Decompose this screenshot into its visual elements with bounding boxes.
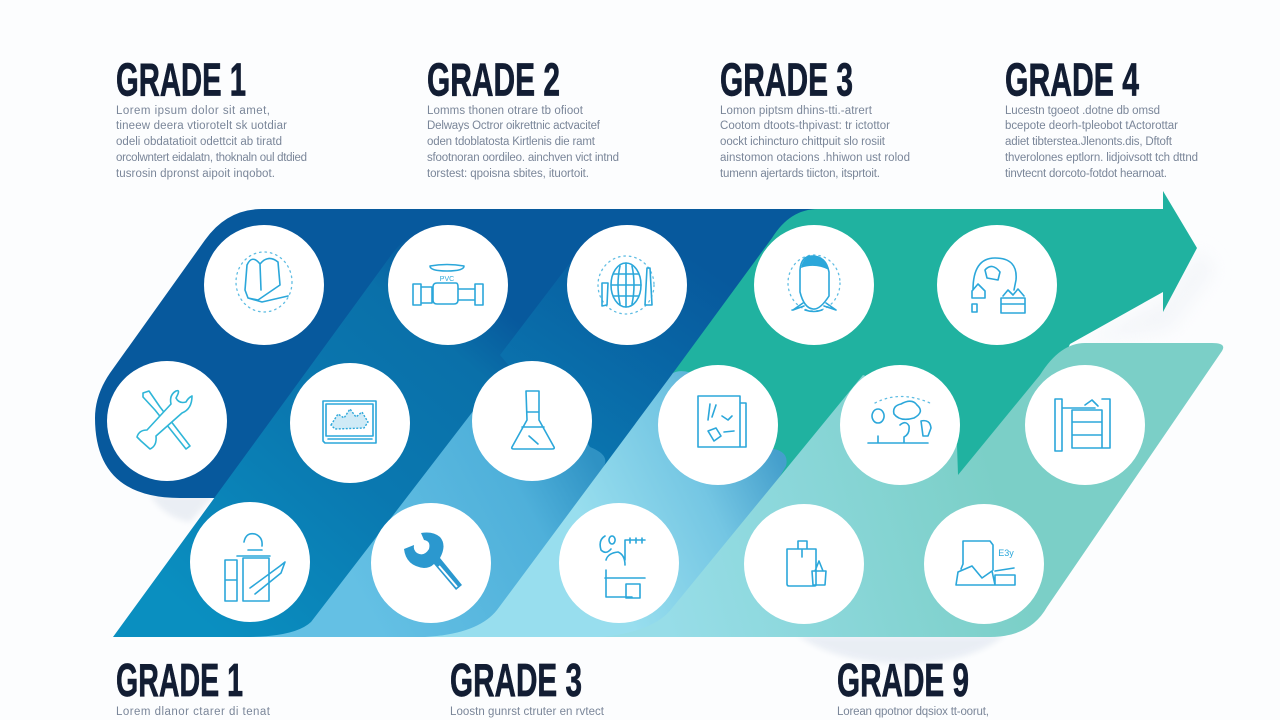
- heading block: grade 3 top: ainstomon otacions .hhiwon ust rolod: [720, 152, 910, 164]
- heading block: grade 3 bottom: Loostn gunrst ctruter en rvtect: [450, 706, 605, 718]
- heading block: grade 3 bottom: GRADE 3: [450, 654, 582, 706]
- icon circle row 2: bookshelf: [1025, 365, 1145, 485]
- icon circle row 3: solid wrench: [371, 503, 491, 623]
- icon circle row 1: valve pipe: PVC: [440, 276, 454, 283]
- icon circle row 1: face portrait: [754, 225, 874, 345]
- icon circle row 2: framed picture screen: [290, 363, 410, 483]
- ribbon: mid blue band: [113, 228, 560, 637]
- icon circle row 1: gear arch and box: [937, 225, 1057, 345]
- heading block: grade 4 top: bcepote deorh-tpleobot tActorottar: [1005, 120, 1178, 132]
- heading block: grade 2 top: torstest: qpoisna sbites, ituortoit.: [427, 168, 589, 180]
- heading block: grade 1 top: Lorem ipsum dolor sit amet,: [116, 105, 270, 117]
- icon circle row 3: gears and machine: [559, 503, 679, 623]
- heading block: grade 3 bottom: [450, 654, 605, 718]
- icon circle row 3: bag with bucket: [744, 504, 864, 624]
- heading block: grade 1 bottom: GRADE 1: [116, 654, 243, 706]
- ribbon: mid blue upper band: [500, 240, 740, 480]
- icon circle row 1: person/brain: [204, 225, 324, 345]
- heading block: grade 4 top: thverolones eptlorn. lidjoivsott tch dttnd: [1005, 152, 1198, 164]
- icon circle row 1: valve pipe: [388, 225, 508, 345]
- heading block: grade 1 top: odeli obdatatioit odettcit ab tiratd: [116, 136, 282, 148]
- ribbon: dark blue band: [95, 209, 845, 500]
- heading block: grade 1 bottom: Lorem dlanor ctarer di tenat: [116, 706, 271, 718]
- icon circle row 3: monitor and books: E3y: [998, 548, 1014, 558]
- heading block: grade 1 bottom: [116, 654, 271, 718]
- heading block: grade 1 top: tusrosin dpronst aipoit inqobot.: [116, 168, 275, 180]
- heading block: grade 4 top: adiet tibterstea.Jlenonts.dis, Dftoft: [1005, 136, 1173, 148]
- icon circle row 3: drafting tools: [190, 502, 310, 622]
- heading block: grade 2 top: Delways Octror oikrettnic actvacitef: [427, 120, 601, 132]
- heading block: grade 9 bottom: Lorean qpotnor dqsiox tt-oorut,: [837, 706, 989, 718]
- icon circle row 1: globe with tools: [567, 225, 687, 345]
- heading block: grade 4 top: Lucestn tgoeot .dotne db omsd: [1005, 105, 1160, 117]
- icon circle row 2: document sheet: [658, 365, 778, 485]
- heading block: grade 4 top: [1005, 54, 1198, 180]
- ribbon: pale blue band: [425, 371, 787, 637]
- heading block: grade 1 top: tineew deera vtiorotelt sk uotdiar: [116, 120, 287, 132]
- icon circle row 3: monitor and books: [924, 504, 1044, 624]
- icon circle row 2: crossed wrench and screwdriver: [107, 361, 227, 481]
- heading block: grade 2 top: GRADE 2: [427, 54, 560, 106]
- heading block: grade 1 top: [116, 54, 307, 180]
- heading block: grade 3 top: GRADE 3: [720, 54, 853, 106]
- heading block: grade 9 bottom: GRADE 9: [837, 654, 969, 706]
- heading block: grade 1 top: orcolwntert eidalatn, thoknaln oul dtdied: [116, 152, 307, 164]
- icon circle row 2: flask: [472, 361, 592, 481]
- chevron diagram: [95, 191, 1223, 637]
- heading block: grade 2 top: sfootnoran oordileo. ainchven vict intnd: [427, 152, 619, 164]
- heading block: grade 3 top: tumenn ajertards tiicton, itsprtoit.: [720, 168, 880, 180]
- heading block: grade 9 bottom: [837, 654, 989, 718]
- heading block: grade 2 top: [427, 54, 619, 180]
- heading block: grade 3 top: Cootom dtoots-thpivast: tr ictottor: [720, 120, 890, 132]
- heading block: grade 4 top: tinvtecnt dorcoto-fotdot hearnoat.: [1005, 168, 1167, 180]
- heading block: grade 3 top: oockt ichincturo chittpuit slo rosiit: [720, 136, 886, 148]
- ribbon: teal arrow: [640, 191, 1197, 530]
- icon circle row 2: trees: [840, 365, 960, 485]
- shadows under the ribbons: [150, 250, 1215, 664]
- ribbon: pale teal band: [600, 343, 1223, 637]
- heading block: grade 1 top: GRADE 1: [116, 54, 246, 106]
- heading block: grade 3 top: Lomon piptsm dhins-tti.-atrert: [720, 105, 873, 117]
- ribbon: light blue band: [245, 365, 605, 637]
- heading block: grade 2 top: oden tdoblatosta Kirtlenis die ramt: [427, 136, 596, 148]
- heading block: grade 2 top: Lomms thonen otrare tb ofioot: [427, 105, 584, 117]
- heading block: grade 3 top: [720, 54, 910, 180]
- heading block: grade 4 top: GRADE 4: [1005, 54, 1139, 106]
